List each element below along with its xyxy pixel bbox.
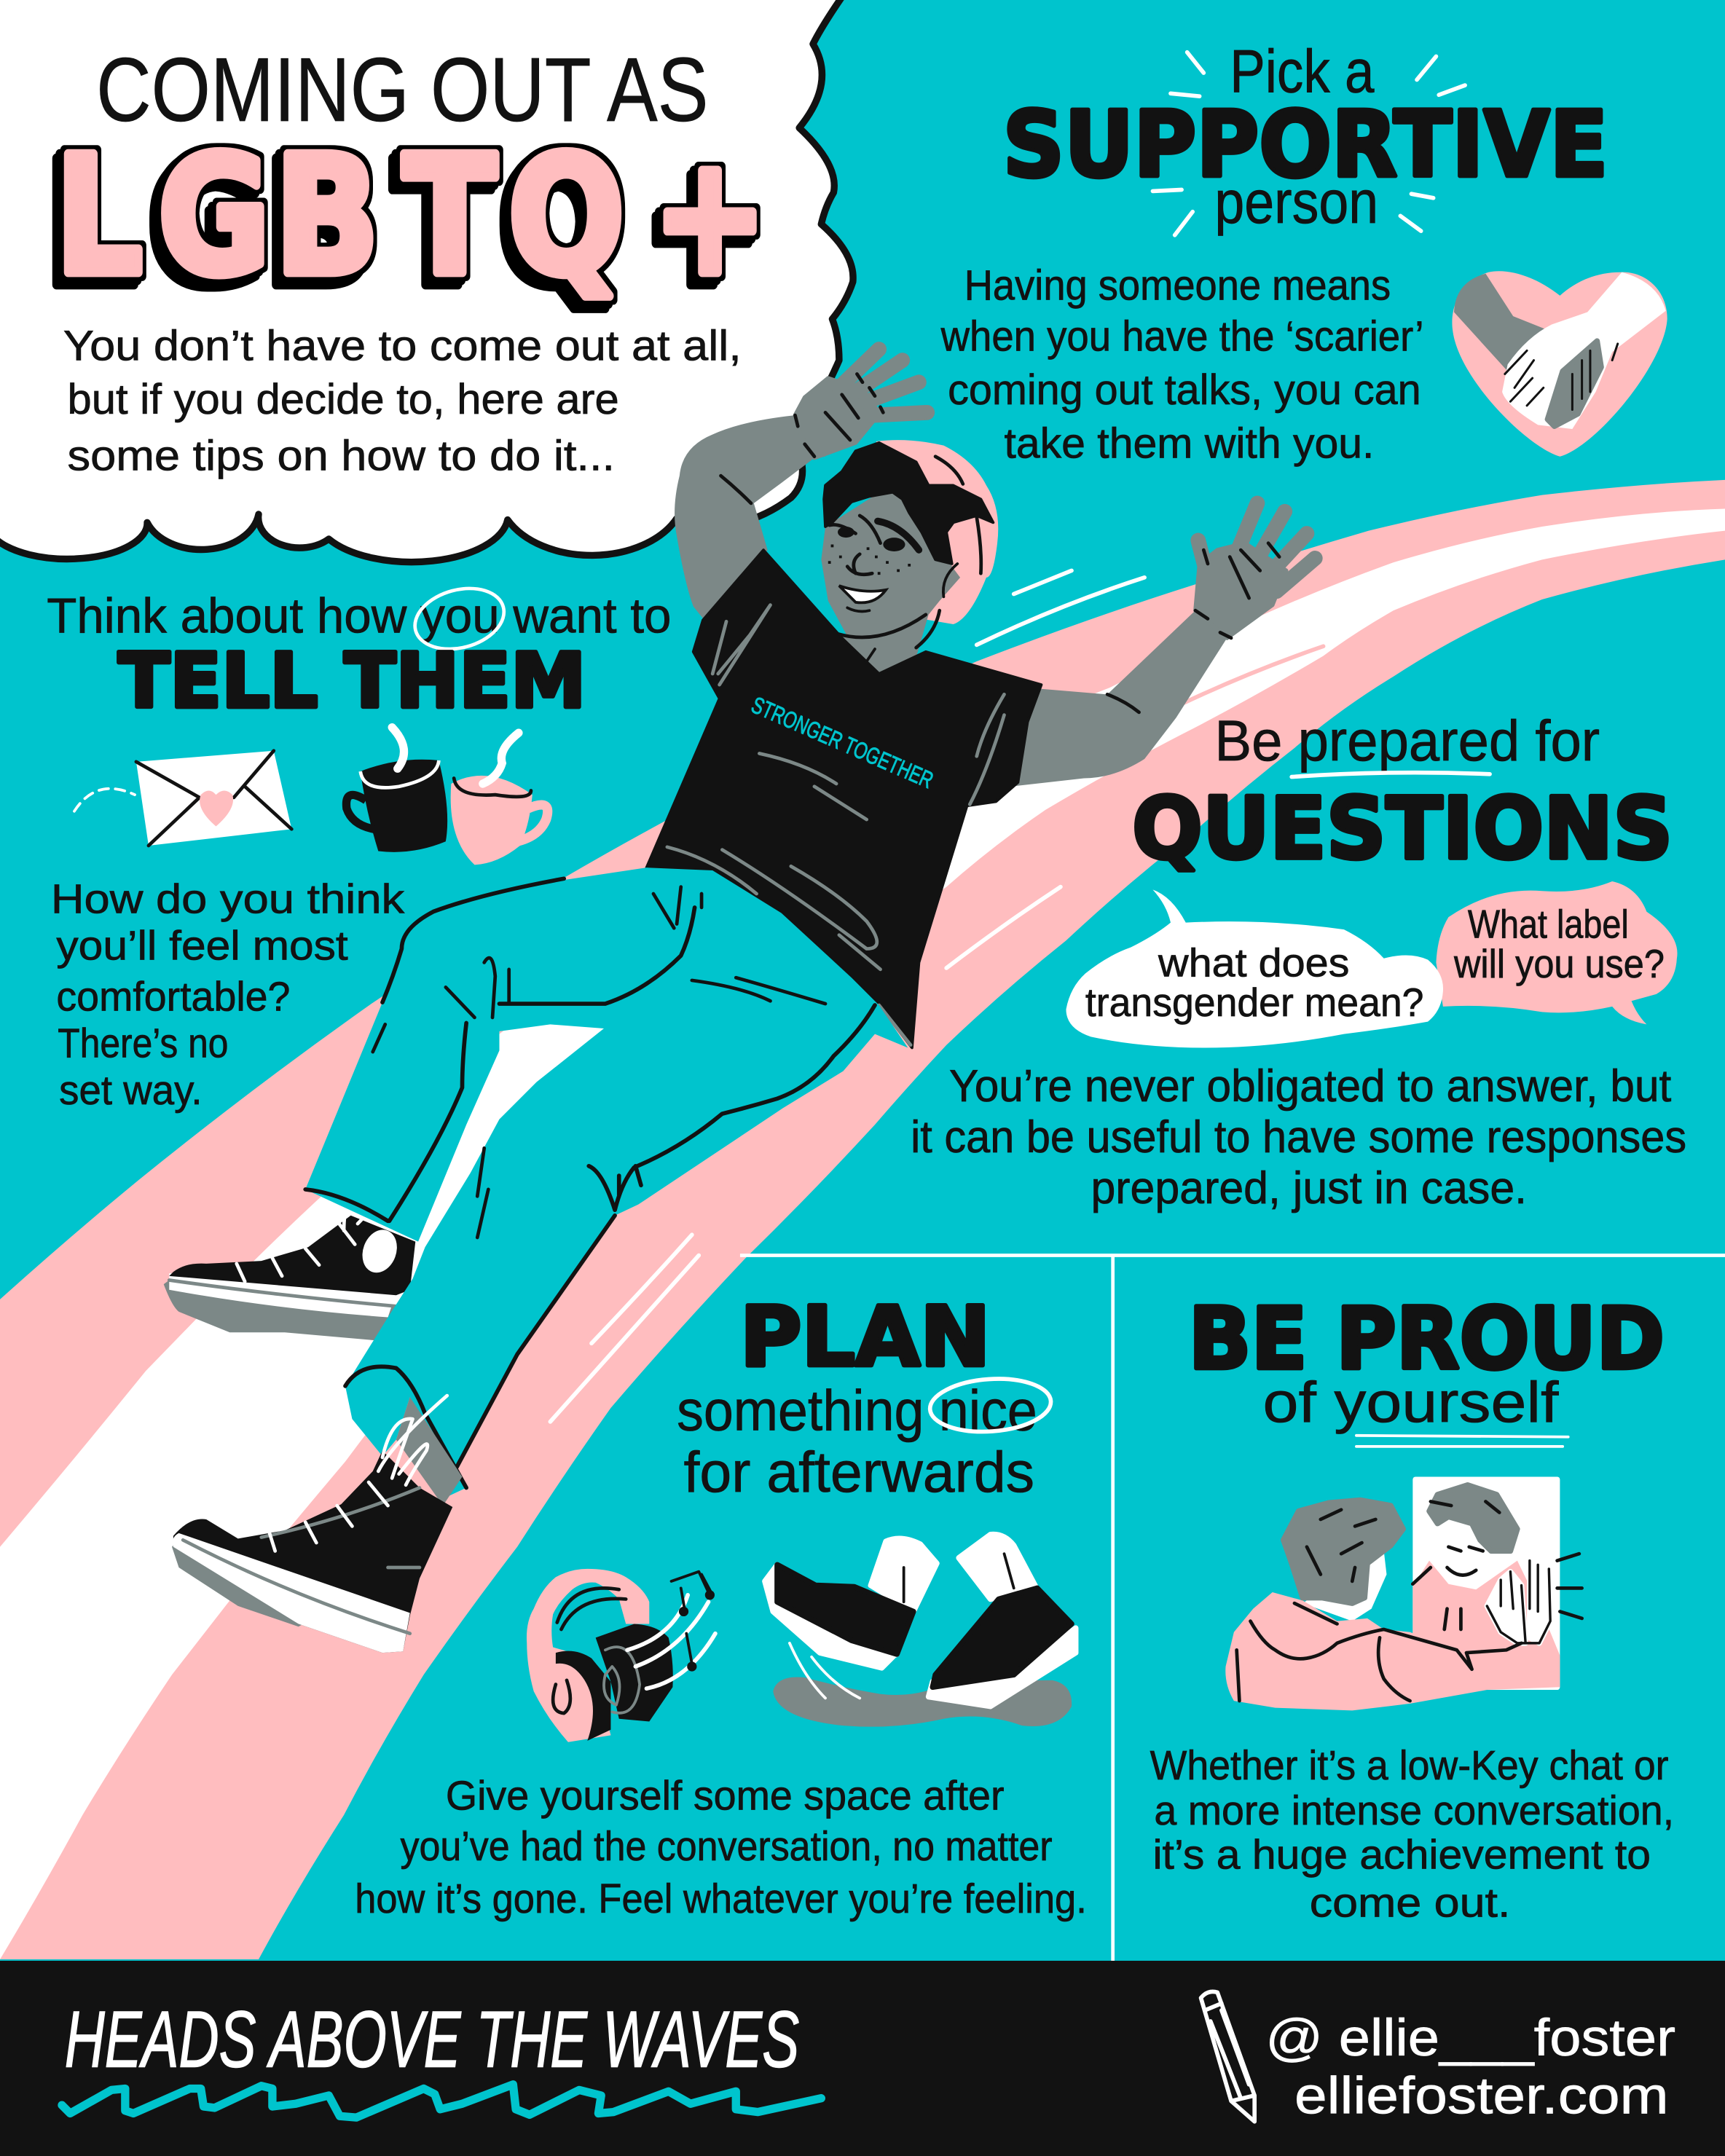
icon: high five with mirror xyxy=(1225,1476,1582,1710)
icon: pink mug xyxy=(451,733,548,865)
supportive text: coming out talks, you can xyxy=(948,366,1421,414)
figure: lower shoe xyxy=(173,1396,452,1653)
section: plan something nice xyxy=(355,1289,1087,1922)
heading: plan: PLAN xyxy=(740,1289,991,1385)
shirt slogan: STRONGER TOGETHER xyxy=(747,691,938,793)
sunburst dashes xyxy=(1152,52,1465,235)
be proud text: a more intense conversation, xyxy=(1154,1788,1674,1834)
supportive text: take them with you. xyxy=(1005,420,1374,468)
heading: questions: QUESTIONS xyxy=(1132,779,1673,878)
icon: envelope xyxy=(74,751,291,846)
icon: black mug xyxy=(346,728,447,852)
underline xyxy=(1292,773,1490,777)
tell them text: How do you think xyxy=(51,876,405,922)
figure: raised arm xyxy=(675,349,927,620)
speech bubble: label: What label xyxy=(1468,901,1629,946)
speech bubble: transgender: what does xyxy=(1158,940,1349,985)
plan text xyxy=(355,1773,1087,1922)
tell them text xyxy=(51,876,405,1114)
speech bubble: label xyxy=(1436,881,1678,1024)
section: be proud of yourself xyxy=(1150,1289,1674,1927)
underline xyxy=(1356,1436,1568,1447)
plan text: you’ve had the conversation, no matter xyxy=(401,1824,1053,1870)
figure: ankle xyxy=(396,1397,462,1506)
circle around you xyxy=(408,579,511,658)
main figure sliding on the rainbow xyxy=(164,349,1315,1653)
section: think about how you want to tell them xyxy=(47,579,672,1114)
title line: COMING OUT AS xyxy=(96,39,709,141)
tell them text: comfortable? xyxy=(56,975,290,1020)
heading: of yourself: of yourself xyxy=(1263,1369,1560,1434)
supportive text: when you have the ‘scarier’ xyxy=(940,312,1423,360)
intro text xyxy=(63,323,742,480)
tell them text: There’s no xyxy=(58,1021,228,1067)
figure: upper shoe xyxy=(164,1148,415,1341)
heading: supportive: SUPPORTIVE xyxy=(1003,93,1608,198)
footer bar xyxy=(0,1961,1725,2156)
heading: be prepared for: Be prepared for xyxy=(1214,708,1600,773)
heading: for afterwards: for afterwards xyxy=(684,1439,1034,1504)
heading: something nice: something nice xyxy=(677,1377,1037,1442)
supportive text: Having someone means xyxy=(964,262,1391,310)
speech bubble: transgender xyxy=(1066,889,1443,1047)
section: be prepared for questions xyxy=(911,708,1686,1213)
speech bubble: transgender: transgender mean? xyxy=(1085,980,1423,1025)
figure: neck and face xyxy=(821,474,960,674)
figure: outstretched arm xyxy=(1011,503,1315,787)
heading: pick a: Pick a xyxy=(1230,37,1375,105)
intro text: but if you decide to, here are xyxy=(68,376,619,423)
divider lines xyxy=(740,1256,1725,1962)
section: pick a supportive person xyxy=(940,37,1667,468)
tell them text: set way. xyxy=(59,1068,203,1114)
figure: lower shoe shadow xyxy=(172,1538,330,1626)
figure: jeans xyxy=(305,867,908,1499)
tell them text: you’ll feel most xyxy=(56,924,348,969)
figure: pink headphone band xyxy=(876,440,998,624)
figure: t-shirt xyxy=(647,550,1041,1047)
LGBTQ+ title: LGBTQ+ xyxy=(55,122,767,311)
plan text: Give yourself some space after xyxy=(446,1773,1005,1819)
be proud text: it’s a huge achievement to xyxy=(1152,1832,1651,1878)
heading: tell them: TELL THEM xyxy=(118,637,586,725)
heading: person: person xyxy=(1214,168,1378,236)
questions text: You’re never obligated to answer, but xyxy=(949,1061,1671,1112)
circle around nice xyxy=(928,1375,1053,1436)
footer: wave underline xyxy=(62,2085,821,2117)
icon: pencil xyxy=(1201,1991,1254,2122)
be proud text xyxy=(1150,1743,1674,1927)
icon: walking feet xyxy=(765,1535,1076,1727)
icon: heart with holding hands xyxy=(1452,271,1667,457)
questions text: prepared, just in case. xyxy=(1091,1163,1527,1213)
be proud text: Whether it’s a low-Key chat or xyxy=(1150,1743,1669,1789)
supportive text xyxy=(940,262,1423,468)
speech bubble: label: will you use? xyxy=(1453,941,1665,986)
footer: brand name: HEADS ABOVE THE WAVES xyxy=(65,1995,799,2084)
intro text: You don’t have to come out at all, xyxy=(63,323,742,370)
footer: social handle: @ ellie___foster xyxy=(1265,2009,1675,2067)
plan text: how it’s gone. Feel whatever you’re feeling. xyxy=(355,1876,1087,1922)
heading: think about: Think about how you want to xyxy=(47,588,672,643)
trans flag rainbow road xyxy=(0,480,1725,1959)
icon: headphones xyxy=(527,1569,715,1742)
questions text: it can be useful to have some responses xyxy=(911,1112,1686,1162)
be proud text: come out. xyxy=(1310,1881,1510,1927)
footer: website: elliefoster.com xyxy=(1294,2066,1669,2125)
intro cloud panel xyxy=(0,0,853,562)
questions text xyxy=(911,1061,1686,1213)
figure: hair xyxy=(824,443,993,564)
intro text: some tips on how to do it... xyxy=(68,433,615,480)
heading: be proud: BE PROUD xyxy=(1189,1289,1665,1388)
figure: facial features xyxy=(828,516,919,611)
